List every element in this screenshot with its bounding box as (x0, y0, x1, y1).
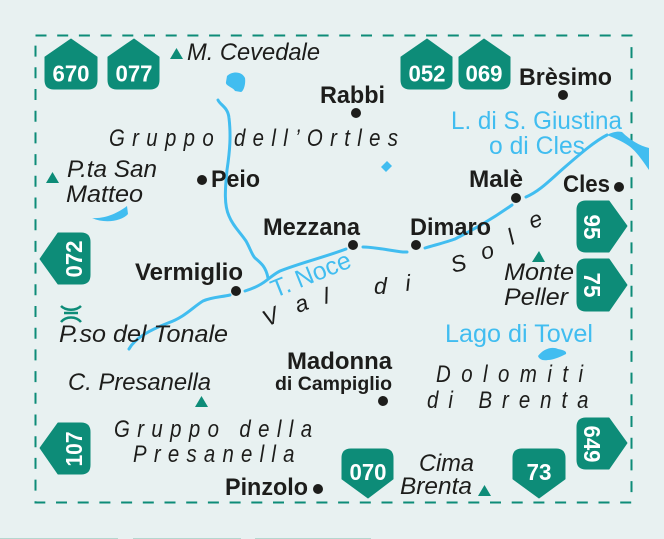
lake: Santa Giustina (607, 132, 649, 170)
water labels: o di Cles (489, 132, 585, 160)
badge 107: 107 (61, 432, 87, 466)
town labels: Madonna (287, 348, 393, 375)
badge 649 (577, 418, 627, 469)
town labels (135, 64, 612, 501)
badge 95: 95 (579, 214, 605, 240)
icon: mountain pass (61, 306, 81, 322)
peak labels: P.so del Tonale (59, 321, 228, 348)
region labels: Dolomiti (436, 360, 584, 387)
badge 95 (577, 201, 627, 252)
peak labels: Cima (419, 450, 474, 477)
region labels: Gruppo dell’Ortles (109, 124, 398, 151)
badge 670: 670 (52, 60, 90, 86)
town labels: Peio (211, 166, 260, 193)
badge 73: 73 (526, 459, 552, 485)
badge 75 (577, 259, 627, 311)
water labels: Lago di Tovel (445, 320, 593, 348)
region labels (109, 124, 588, 467)
town labels: di Campiglio (275, 374, 392, 395)
town labels: Mezzana (263, 214, 361, 241)
water labels: L. di S. Giustina (451, 107, 622, 135)
badge 072: 072 (61, 240, 87, 278)
town labels: Pinzolo (225, 474, 308, 501)
peak labels: Matteo (66, 181, 143, 208)
bottom edge strip (0, 538, 371, 539)
badge 069 (459, 39, 510, 89)
peak triangles (46, 48, 545, 496)
lake: San Matteo glacier (92, 206, 128, 221)
town labels: Rabbi (320, 82, 385, 109)
badge 069: 069 (466, 60, 502, 86)
badge 077 (108, 39, 159, 89)
river: Noce (129, 100, 607, 349)
badge 107 (40, 423, 90, 474)
peak labels: M. Cevedale (187, 39, 320, 66)
badge 070 (342, 449, 393, 498)
town dots (197, 90, 624, 494)
region labels: di Brenta (427, 386, 589, 413)
badge 052: 052 (408, 60, 446, 86)
region labels: Gruppo della (114, 415, 312, 442)
peak labels: C. Presanella (68, 369, 211, 396)
water labels (267, 107, 622, 348)
town labels: Malè (469, 166, 523, 193)
town labels: Dimaro (410, 214, 491, 241)
badge 649: 649 (579, 426, 605, 462)
badge 75: 75 (579, 272, 605, 298)
peak labels (59, 39, 574, 500)
map number badges (40, 39, 627, 498)
region labels: Val di Sole (258, 205, 546, 332)
peak labels: Peller (504, 284, 569, 311)
town labels: Vermiglio (135, 259, 243, 286)
badge 73 (513, 449, 565, 498)
badge 052 (401, 39, 452, 89)
lake: small pond (381, 161, 392, 172)
town labels: Cles (563, 171, 610, 198)
badge 077: 077 (116, 60, 152, 86)
lake: Cevedale glacier (226, 72, 245, 92)
badge 072 (40, 233, 90, 284)
map frame (36, 36, 632, 502)
badge 670 (45, 39, 97, 89)
lake: Lago di Tovel (538, 348, 566, 360)
peak labels: Monte (504, 259, 574, 286)
region labels: Presanella (133, 440, 295, 467)
peak labels: P.ta San (67, 156, 157, 183)
town labels: Brèsimo (519, 64, 612, 91)
peak labels: Brenta (400, 473, 472, 500)
badge 070: 070 (350, 459, 386, 485)
water labels: T. Noce (267, 246, 355, 304)
